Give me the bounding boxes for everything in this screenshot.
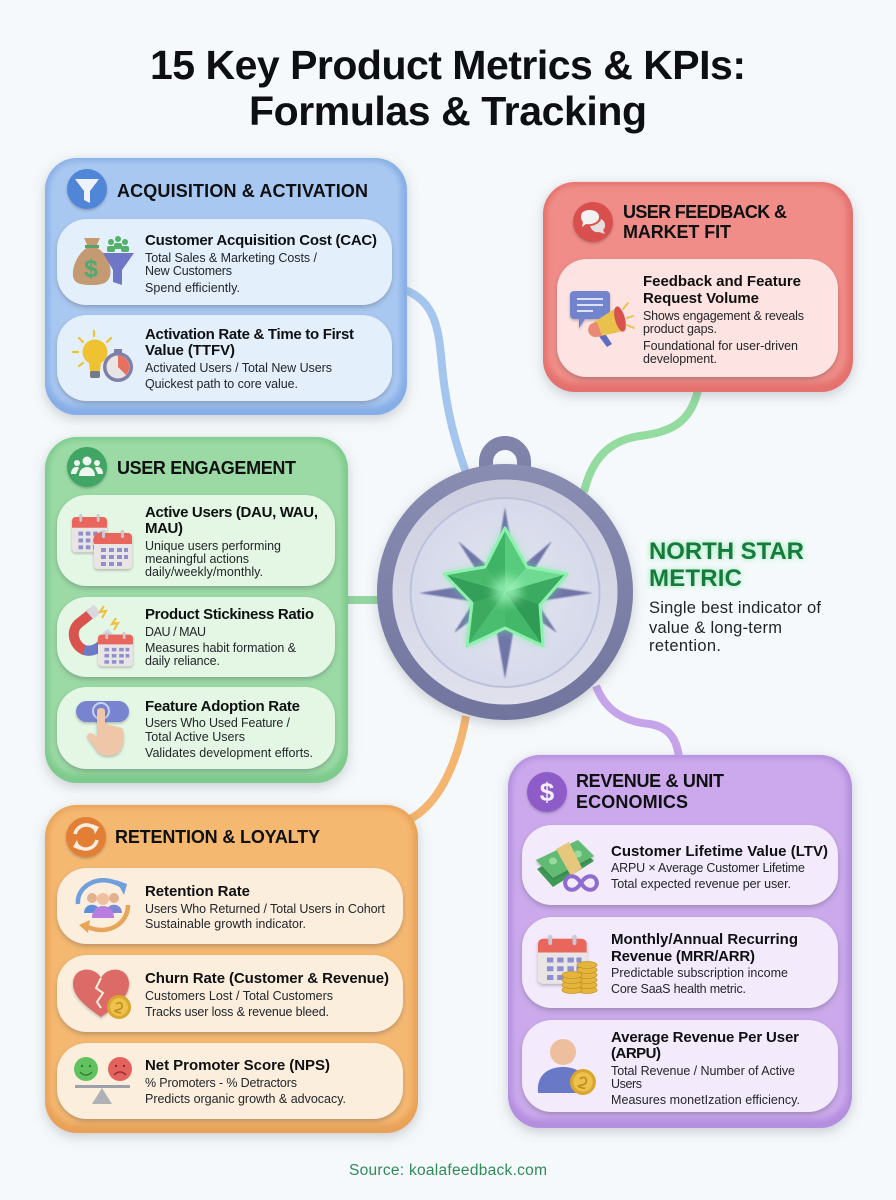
card text: daily/weekly/monthly. — [145, 565, 263, 579]
card: activation rate — [57, 315, 392, 401]
section heading: USER FEEDBACK & — [623, 202, 787, 222]
section icon: group of people — [67, 447, 107, 487]
icon: magnet and calendar — [74, 606, 133, 666]
section heading: MARKET FIT — [623, 222, 731, 242]
card: average revenue per user — [522, 1020, 838, 1112]
card text: development. — [643, 352, 717, 366]
card text: Active Users (DAU, WAU, — [145, 504, 318, 521]
callout: north star metric — [649, 538, 821, 655]
icon: people in cycle arrows — [78, 880, 128, 933]
icon: money bag and funnel — [73, 236, 134, 285]
callout: north star metric: METRIC — [649, 565, 742, 592]
section heading: REVENUE & UNIT — [576, 771, 724, 791]
callout: north star metric: NORTH STAR — [649, 538, 804, 565]
panel: user feedback and market fit — [543, 182, 853, 392]
card text — [611, 1029, 800, 1107]
card text: Request Volume — [643, 290, 759, 307]
section heading: ECONOMICS — [576, 792, 688, 812]
card: recurring revenue — [522, 917, 838, 1008]
card text: Spend efficiently. — [145, 281, 240, 295]
card text: Users Who Used Feature / — [145, 716, 291, 730]
medal loop — [486, 443, 524, 468]
card: customer acquisition cost — [57, 219, 392, 305]
card text: ARPU × Average Customer Lifetime — [611, 861, 805, 875]
medal inner ring — [392, 480, 618, 704]
icon: light bulb and stopwatch — [73, 331, 133, 382]
card: feature adoption — [57, 687, 335, 769]
section heading: ACQUISITION & ACTIVATION — [117, 181, 368, 201]
source line: Source: koalafeedback.com — [349, 1162, 547, 1179]
card text: New Customers — [145, 264, 232, 278]
card text — [611, 843, 828, 891]
section heading — [576, 771, 724, 812]
icon: calendar and coins — [538, 935, 597, 994]
card text: Value (TTFV) — [145, 342, 235, 359]
section heading: USER ENGAGEMENT — [117, 458, 296, 478]
compass spikes — [419, 507, 593, 679]
icon: chat bubble and megaphone — [570, 291, 634, 347]
card text: Measures habit formation & — [145, 641, 297, 655]
card text: meaningful actions — [145, 552, 249, 566]
card text: Activation Rate & Time to First — [145, 326, 354, 343]
card text: Revenue (MRR/ARR) — [611, 948, 755, 965]
section heading — [623, 202, 787, 242]
card text: Total Sales & Marketing Costs / — [145, 251, 318, 265]
card text: DAU / MAU — [145, 625, 206, 639]
card text: Predictable subscription income — [611, 966, 788, 980]
card text: Core SaaS health metric. — [611, 982, 746, 996]
panel: user engagement — [45, 437, 348, 783]
card text — [145, 504, 318, 579]
section icon: funnel — [67, 169, 107, 209]
icon: person and coin — [538, 1039, 596, 1095]
icon: hand pressing button — [76, 701, 129, 756]
panel: revenue and unit economics — [508, 755, 852, 1128]
card text: Predicts organic growth & advocacy. — [145, 1092, 346, 1106]
icon: cash stack and infinity — [536, 840, 597, 890]
card text: Foundational for user-driven — [643, 339, 798, 353]
card text: Customer Lifetime Value (LTV) — [611, 843, 828, 860]
medal outer ring — [377, 464, 633, 720]
icon: money bag and funnel: $ — [84, 255, 98, 283]
card text: Total Active Users — [145, 730, 245, 744]
icon: smiley scale — [74, 1057, 132, 1104]
card text: Churn Rate (Customer & Revenue) — [145, 970, 389, 987]
title: 15 Key Product Metrics & KPIs: — [150, 42, 746, 88]
green star — [444, 528, 567, 646]
section icon: speech bubbles — [573, 202, 613, 242]
card: churn rate — [57, 955, 403, 1032]
card text: Net Promoter Score (NPS) — [145, 1057, 330, 1074]
card text — [145, 232, 377, 295]
card text — [145, 1057, 346, 1106]
connector: feedback to medal — [584, 390, 698, 492]
card text: Users — [611, 1077, 642, 1091]
card text: product gaps. — [643, 322, 717, 336]
card text: Customers Lost / Total Customers — [145, 989, 333, 1003]
card text: Validates development efforts. — [145, 746, 313, 760]
card text — [145, 970, 389, 1019]
card text: Feedback and Feature — [643, 273, 801, 290]
card text: Users Who Returned / Total Users in Cohort — [145, 902, 386, 916]
section icon: dollar sign: $ — [540, 777, 555, 807]
card text: Quickest path to core value. — [145, 377, 298, 391]
card: retention rate — [57, 868, 403, 944]
card text: Activated Users / Total New Users — [145, 361, 332, 375]
section heading: RETENTION & LOYALTY — [115, 827, 320, 847]
green glow — [444, 528, 567, 646]
section icon: dollar sign — [527, 772, 567, 812]
title: Formulas & Tracking — [249, 88, 647, 134]
card text — [643, 273, 804, 366]
connector: engagement to medal — [346, 596, 380, 604]
section icon: refresh arrows — [66, 817, 106, 857]
title — [150, 42, 746, 134]
card text: Total expected revenue per user. — [611, 877, 791, 891]
card text: Unique users performing — [145, 539, 281, 553]
card text — [145, 326, 354, 391]
card: net promoter score — [57, 1043, 403, 1119]
card text: Retention Rate — [145, 883, 250, 900]
panel: retention and loyalty — [45, 805, 418, 1133]
card text: Tracks user loss & revenue bleed. — [145, 1005, 329, 1019]
card text: Total Revenue / Number of Active — [611, 1064, 795, 1078]
card text: MAU) — [145, 520, 183, 537]
connector: revenue to medal — [596, 686, 679, 758]
card text — [145, 606, 314, 668]
card text — [611, 931, 798, 996]
card text: Average Revenue Per User — [611, 1029, 799, 1046]
card text: Shows engagement & reveals — [643, 309, 804, 323]
card text: Sustainable growth indicator. — [145, 917, 306, 931]
card text: Measures monetIzation efficiency. — [611, 1093, 800, 1107]
card text — [145, 698, 313, 760]
card: product stickiness — [57, 597, 335, 677]
connector: acquisition to medal — [405, 290, 468, 478]
card text: % Promoters - % Detractors — [145, 1076, 297, 1090]
card text — [145, 883, 386, 931]
card: feedback and feature requests — [557, 259, 838, 377]
callout: north star metric: value & long-term — [649, 619, 782, 637]
callout: north star metric: Single best indicator of — [649, 599, 821, 617]
card: customer lifetime value — [522, 825, 838, 905]
connector: retention to medal — [408, 716, 466, 820]
card text: Feature Adoption Rate — [145, 698, 300, 715]
card text: Customer Acquisition Cost (CAC) — [145, 232, 377, 249]
card text: Monthly/Annual Recurring — [611, 931, 798, 948]
medal: north star compass — [377, 443, 633, 720]
medal plate — [410, 498, 600, 687]
icon: two calendars — [72, 514, 132, 569]
card text: daily reliance. — [145, 654, 220, 668]
icon: broken heart with coin — [73, 970, 131, 1019]
callout: north star metric: retention. — [649, 637, 721, 655]
card text: Product Stickiness Ratio — [145, 606, 314, 623]
panel: acquisition and activation — [45, 158, 407, 415]
card: active users — [57, 495, 335, 586]
card text: (ARPU) — [611, 1045, 661, 1062]
